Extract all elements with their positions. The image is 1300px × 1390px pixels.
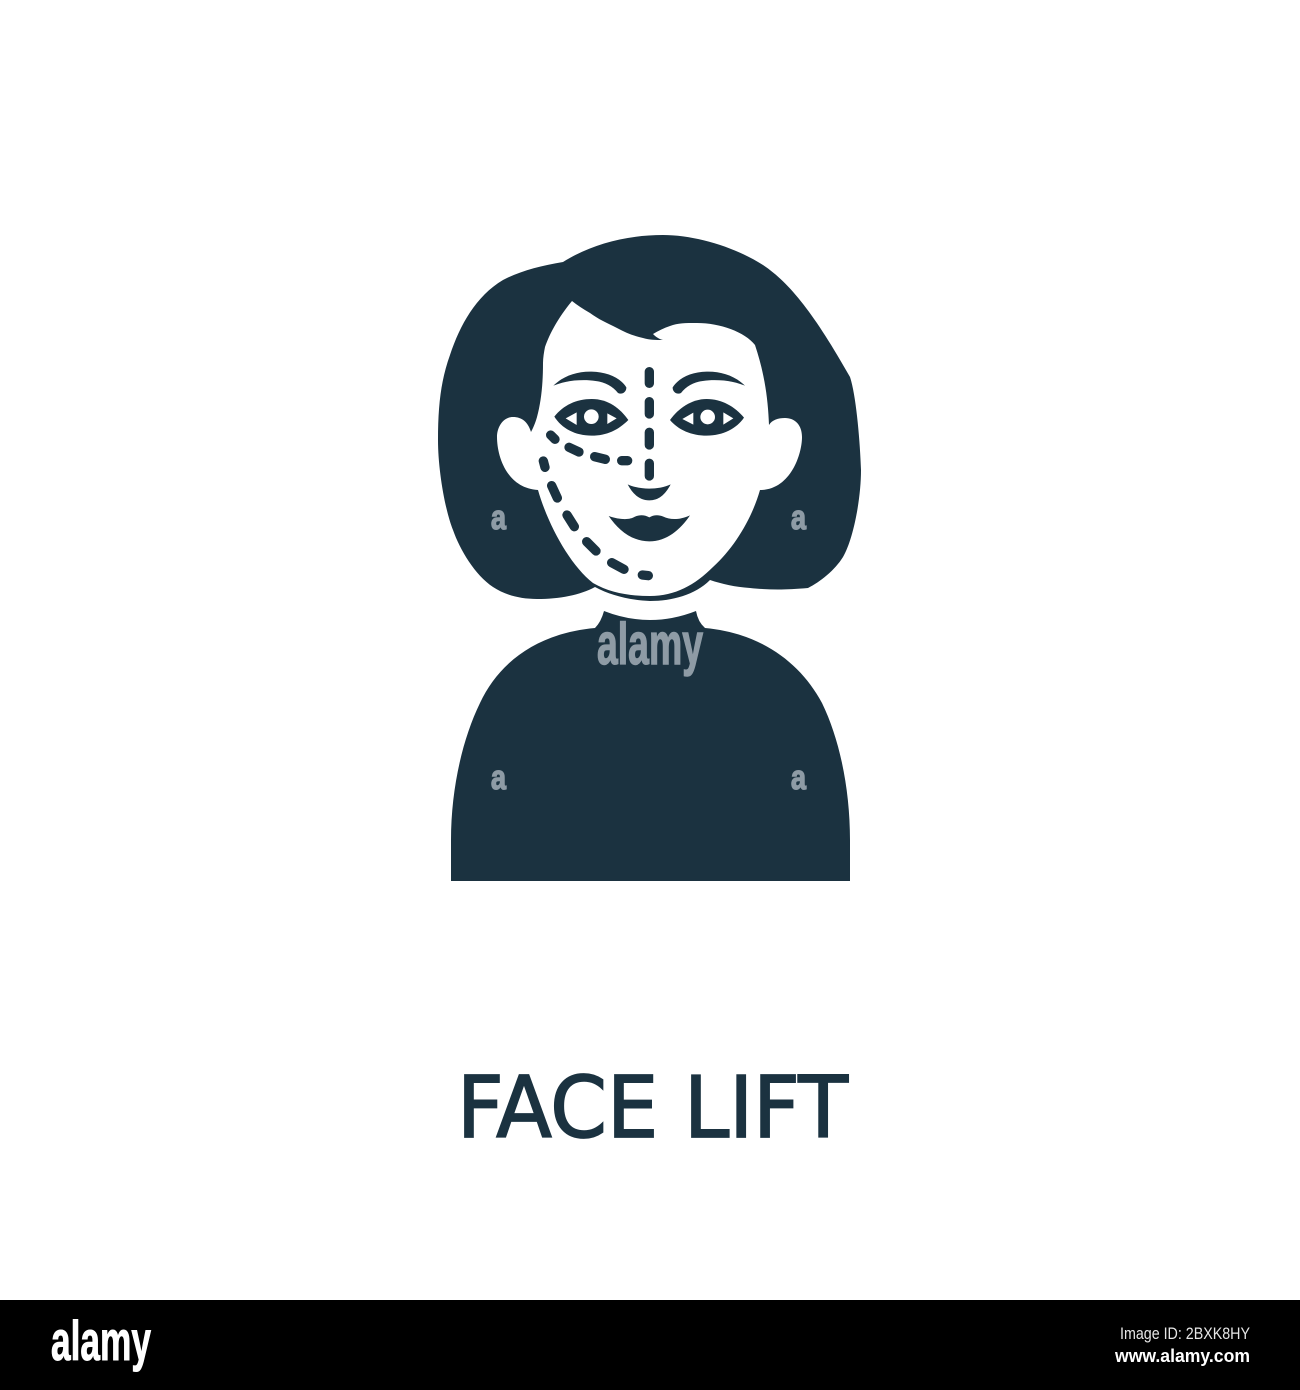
lips [609,515,690,541]
icon: woman with face lift markings [438,235,861,881]
nose [628,484,671,500]
footer logo: alamy [51,1309,151,1372]
watermark: a [491,759,507,797]
left eye [554,399,628,436]
body [451,611,850,881]
image id: Image ID: 2BXK8HY [1120,1324,1250,1343]
right eye [670,399,744,436]
watermark: a [491,499,507,537]
watermark: a [791,499,807,537]
watermark: a [791,759,807,797]
hair [438,235,861,601]
dashed incision lines [543,372,649,576]
watermark: alamy [597,612,703,677]
website: www.alamy.com [1114,1346,1250,1366]
facial features and incision lines [543,372,745,576]
eyebrows [553,372,745,394]
footer bar [0,1300,1300,1390]
face and ears [497,301,802,596]
watermark [491,499,807,797]
title: FACE LIFT [457,1059,849,1158]
